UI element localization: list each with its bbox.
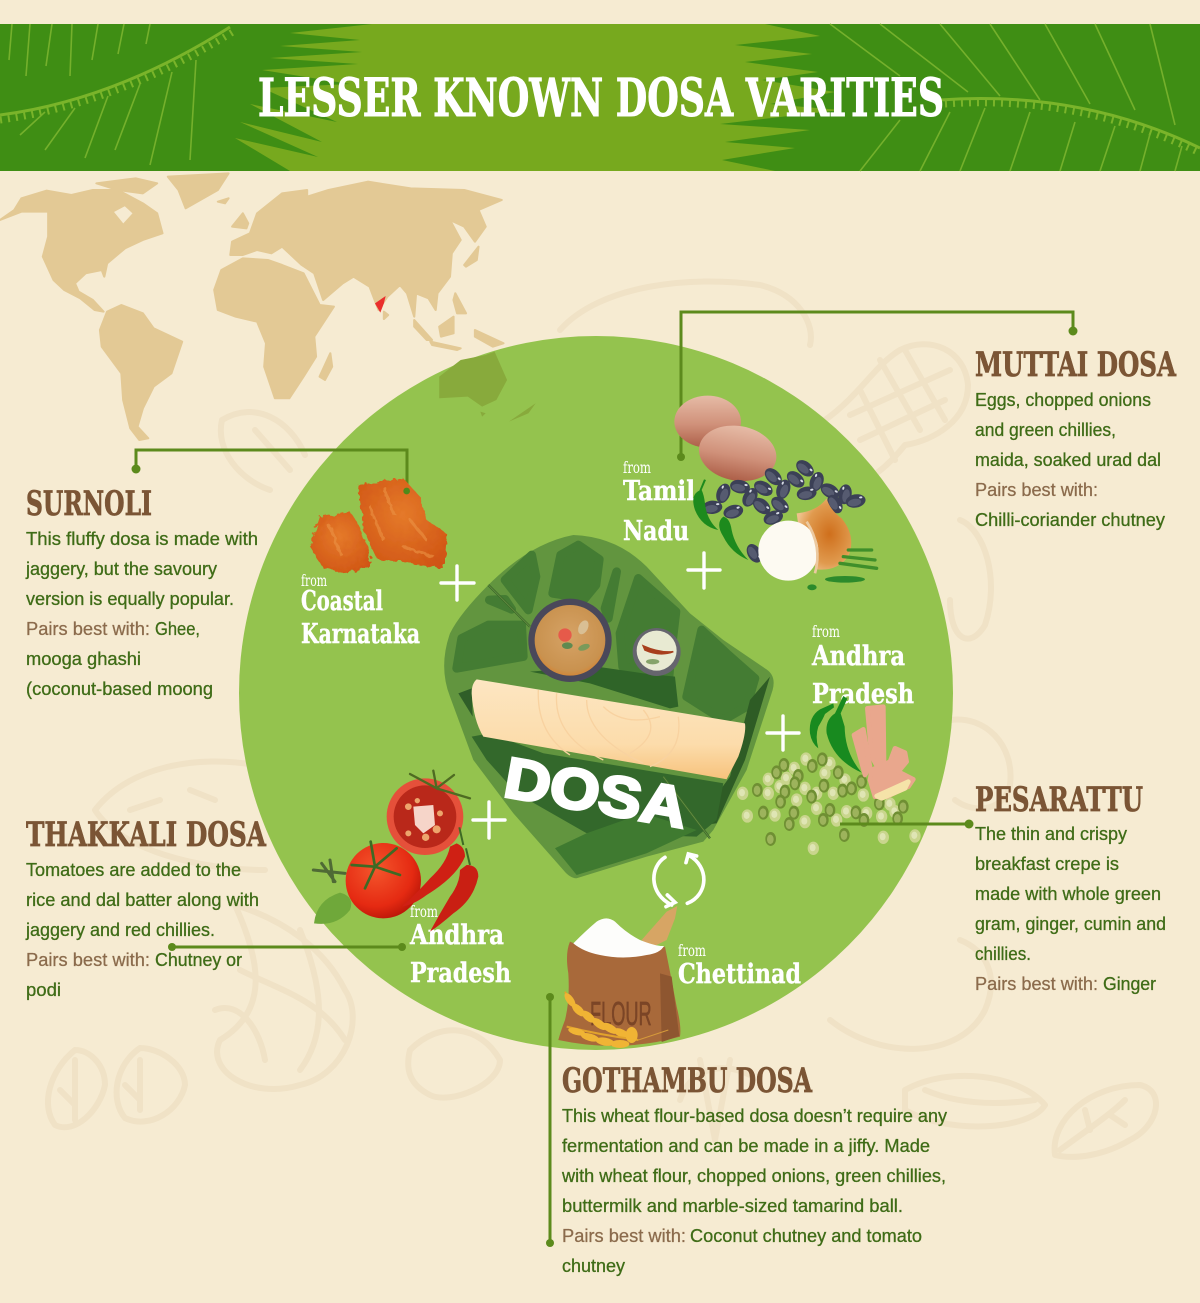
- section: pesarattu: gram, ginger, cumin and: [975, 914, 1166, 934]
- section: muttai dosa: maida, soaked urad dal: [975, 450, 1161, 470]
- label: tamil nadu: Tamil: [623, 476, 695, 507]
- pesarattu ingredients: [737, 696, 921, 855]
- section: gothambu dosa: fermentation and can be made in a jiffy. Made: [562, 1136, 930, 1156]
- section: gothambu dosa: Pairs best with:: [562, 1226, 686, 1246]
- plus icon: tomato: [473, 802, 505, 838]
- DOSA label: DOSA: [500, 746, 692, 841]
- section: surnoli: (coconut-based moong: [26, 679, 213, 699]
- section: pesarattu: chillies.: [975, 944, 1031, 964]
- label: coastal karnataka: [301, 571, 420, 650]
- curry bowl: [528, 599, 612, 682]
- green chillies: [810, 696, 862, 773]
- section: gothambu dosa: chutney: [562, 1256, 625, 1276]
- section: gothambu dosa: This wheat flour-based dosa doesn’t require any: [562, 1106, 947, 1126]
- label: andhra pradesh right: Pradesh: [812, 679, 914, 710]
- world map: [0, 173, 504, 440]
- section: pesarattu: [975, 780, 1166, 994]
- section: muttai dosa: Eggs, chopped onions: [975, 390, 1151, 410]
- south india highlight: [375, 296, 386, 313]
- ginger: [854, 707, 913, 798]
- section: surnoli: jaggery, but the savoury: [25, 559, 217, 579]
- section: muttai dosa: and green chillies,: [975, 420, 1116, 440]
- section: pesarattu: Pairs best with:: [975, 974, 1098, 994]
- flour sack: [558, 906, 680, 1048]
- flour text: FLOUR: [590, 996, 652, 1033]
- tomatoes and chillies: [313, 771, 478, 932]
- dosa roll: [472, 679, 745, 779]
- section: surnoli: This fluffy dosa is made with: [26, 529, 258, 549]
- connector: surnoli: [132, 450, 407, 491]
- palm frond left: [0, 24, 372, 171]
- connector: pesarattu: [840, 820, 974, 828]
- section: thakkali dosa: rice and dal batter along with: [26, 890, 259, 910]
- onion: [758, 498, 877, 590]
- plus icon: jaggery: [441, 566, 474, 600]
- section: pesarattu: The thin and crispy: [975, 824, 1127, 844]
- section: surnoli: Pairs best with:: [26, 619, 150, 639]
- herbs: [313, 860, 351, 924]
- section: thakkali dosa: Chutney or: [155, 950, 242, 970]
- section: gothambu dosa: [561, 1061, 947, 1276]
- wheat: [562, 991, 668, 1048]
- section: surnoli: mooga ghashi: [26, 649, 141, 669]
- section: surnoli: SURNOLI: [26, 484, 152, 524]
- tomato whole: [346, 842, 421, 918]
- moong beans: [737, 752, 921, 855]
- section: thakkali dosa: podi: [26, 980, 61, 1000]
- section: thakkali dosa: jaggery and red chillies.: [25, 920, 215, 940]
- plus icon: eggs: [688, 553, 720, 588]
- tomato half: [387, 771, 470, 855]
- highlighted circle: [239, 336, 953, 1050]
- label: andhra pradesh left: from: [410, 902, 438, 921]
- section: gothambu dosa: Coconut chutney and tomato: [690, 1226, 922, 1246]
- section: surnoli: [25, 484, 258, 699]
- section: gothambu dosa: GOTHAMBU DOSA: [562, 1061, 812, 1101]
- label: coastal karnataka: from: [301, 571, 327, 590]
- chutney bowl: [633, 628, 681, 676]
- map on circle: [375, 296, 536, 422]
- section: thakkali dosa: Tomatoes are added to the: [26, 860, 241, 880]
- section: pesarattu: Ginger: [1103, 974, 1156, 994]
- section: surnoli: Ghee,: [155, 619, 200, 639]
- label: andhra pradesh left: Pradesh: [410, 958, 511, 989]
- palm frond right: [720, 24, 1200, 171]
- label: andhra pradesh right: Andhra: [811, 641, 905, 672]
- section: thakkali dosa: [25, 815, 266, 1000]
- section: gothambu dosa: buttermilk and marble-sized tamarind ball.: [562, 1196, 903, 1216]
- section: gothambu dosa: with wheat flour, chopped onions, green chillies,: [561, 1166, 946, 1186]
- section: muttai dosa: Pairs best with:: [975, 480, 1098, 500]
- label: andhra pradesh right: [811, 622, 914, 710]
- section: surnoli: version is equally popular.: [26, 589, 234, 609]
- label: andhra pradesh right: from: [812, 622, 840, 641]
- section: muttai dosa: Chilli-coriander chutney: [975, 510, 1165, 530]
- red chillies: [402, 827, 478, 932]
- label: chettinad: [678, 941, 801, 990]
- label: chettinad: Chettinad: [678, 959, 801, 990]
- connector: muttai: [677, 312, 1078, 461]
- cycle arrows: [654, 854, 704, 907]
- label: chettinad: from: [678, 941, 706, 960]
- banana leaf: [444, 535, 774, 878]
- label: andhra pradesh left: Andhra: [409, 920, 504, 951]
- section: pesarattu: made with whole green: [975, 884, 1161, 904]
- section: pesarattu: breakfast crepe is: [975, 854, 1119, 874]
- connector: thakkali: [168, 943, 406, 951]
- black beans: [702, 457, 867, 565]
- label: tamil nadu: [623, 458, 695, 547]
- background nut doodles: [48, 281, 1156, 1157]
- section: thakkali dosa: Pairs best with:: [26, 950, 150, 970]
- label: andhra pradesh left: [409, 902, 511, 989]
- plus icon: moong: [767, 716, 799, 750]
- section: thakkali dosa: THAKKALI DOSA: [26, 815, 266, 855]
- label: tamil nadu: Nadu: [623, 516, 689, 547]
- section: muttai dosa: [975, 345, 1176, 530]
- label: tamil nadu: from: [623, 458, 651, 477]
- jaggery: [310, 478, 447, 573]
- green chillies: [693, 479, 748, 560]
- banner: [0, 24, 1200, 171]
- label: coastal karnataka: Coastal: [301, 586, 383, 617]
- muttai ingredients: [674, 396, 877, 590]
- eggs: [674, 396, 781, 487]
- label: coastal karnataka: Karnataka: [301, 619, 420, 650]
- connector: gothambu: [546, 993, 554, 1247]
